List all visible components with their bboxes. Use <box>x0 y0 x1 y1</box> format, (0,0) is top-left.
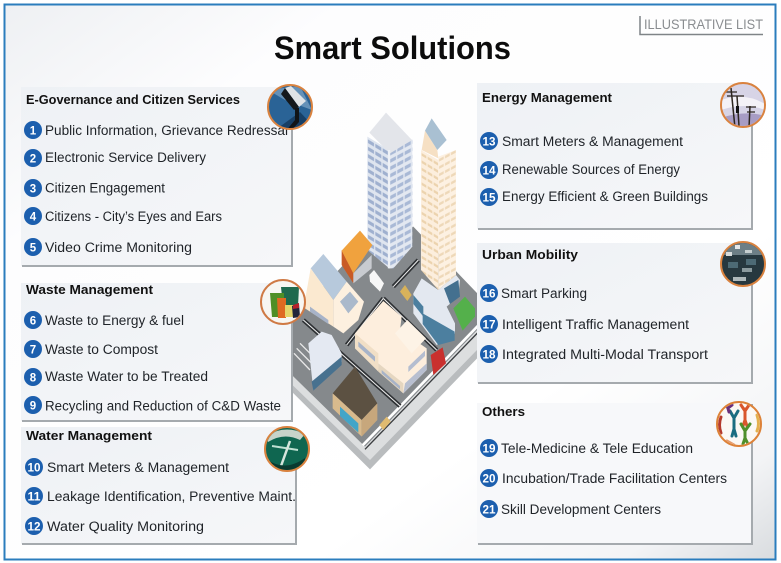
panel: e-governance: E-Governance and Citizen Services <box>26 92 240 107</box>
white van <box>369 270 384 292</box>
panel: energy management: Energy Efficient & Green Buildings <box>502 189 708 204</box>
panel: waste management: 9 <box>30 400 36 412</box>
panel: energy management: Smart Meters & Management <box>502 134 683 149</box>
panel: energy management: Energy Management <box>482 90 613 105</box>
illustrative list tag: ILLUSTRATIVE LIST <box>644 17 763 32</box>
panel: energy management: 14 <box>482 166 496 178</box>
panel: waste management <box>21 282 292 421</box>
icon: traffic <box>721 242 765 286</box>
panel: waste management: 6 <box>30 316 36 328</box>
panel: e-governance: Citizens - City’s Eyes and Ears <box>45 209 222 224</box>
panel: others: 21 <box>482 504 496 516</box>
taxis <box>379 285 412 430</box>
panel: e-governance: 5 <box>30 242 37 254</box>
panel: e-governance: Electronic Service Delivery <box>45 150 206 165</box>
panel: urban mobility: Intelligent Traffic Management <box>502 317 689 332</box>
panel: urban mobility <box>477 243 752 383</box>
panel: urban mobility: 16 <box>482 288 496 300</box>
panel: e-governance: 4 <box>30 212 37 224</box>
blue tower <box>367 113 412 268</box>
panel: energy management: 13 <box>482 136 496 148</box>
panel: water management: Water Quality Monitoring <box>47 519 204 534</box>
icon: people <box>717 402 761 446</box>
panel: urban mobility: Smart Parking <box>501 286 587 301</box>
title: Smart Solutions <box>274 30 511 66</box>
icon: security camera <box>268 85 312 135</box>
panel: waste management: Waste to Compost <box>45 342 158 357</box>
panel: e-governance <box>21 87 292 266</box>
panel: water management: 10 <box>28 462 40 474</box>
panel: waste management: 7 <box>30 344 36 356</box>
panel: water management: Smart Meters & Management <box>47 460 229 475</box>
brown building <box>333 367 377 437</box>
panel: others: Others <box>482 404 525 419</box>
isometric city illustration <box>270 113 490 469</box>
panel: others: Skill Development Centers <box>501 502 661 517</box>
panel: others: Tele-Medicine & Tele Education <box>501 441 693 456</box>
panel: urban mobility: 17 <box>482 320 496 332</box>
panel: energy management <box>477 83 752 229</box>
central cream complex <box>355 301 427 393</box>
panel: water management <box>21 427 296 544</box>
panel: energy management: Renewable Sources of Energy <box>502 162 680 177</box>
panel: energy management: 15 <box>482 192 496 204</box>
panel: waste management: Waste to Energy & fuel <box>45 313 184 328</box>
panel: water management: Leakage Identification, Preventive Maint. <box>47 489 296 504</box>
panel: urban mobility: 18 <box>482 350 496 362</box>
panel: water management: 12 <box>28 522 40 534</box>
panel: others <box>477 403 752 544</box>
panel: e-governance: 1 <box>30 126 37 138</box>
panel: waste management: Waste Management <box>26 282 154 297</box>
panel: waste management: 8 <box>30 372 37 384</box>
ground and roads <box>270 227 490 449</box>
red bus <box>431 347 446 375</box>
panel: e-governance: 2 <box>30 154 36 166</box>
panel: e-governance: Citizen Engagement <box>45 180 165 196</box>
panel: waste management: Waste Water to be Treated <box>45 369 208 384</box>
panel: e-governance: 3 <box>30 184 36 196</box>
orange roof building <box>342 231 372 283</box>
cream tower <box>421 118 456 290</box>
city base <box>277 333 490 469</box>
panel: water management: Water Management <box>26 428 153 443</box>
panel: others: 19 <box>482 444 496 456</box>
panel: urban mobility: Urban Mobility <box>482 247 579 262</box>
icon: water pipes <box>265 427 309 471</box>
panel: others: 20 <box>482 474 496 486</box>
panel: e-governance: Public Information, Grievance Redressal <box>45 123 288 138</box>
cream house with blue roof <box>305 254 364 333</box>
panel: water management: 11 <box>28 492 41 504</box>
icon: power lines <box>721 83 765 128</box>
panel: urban mobility: Integrated Multi-Modal Transport <box>502 347 708 362</box>
white low building <box>308 332 342 391</box>
panel: e-governance: Video Crime Monitoring <box>45 240 192 255</box>
podium with park <box>413 275 475 345</box>
panel: others: Incubation/Trade Facilitation Centers <box>502 471 727 486</box>
icon: waste bins <box>261 280 305 324</box>
panel: waste management: Recycling and Reduction of C&D Waste <box>45 398 281 414</box>
